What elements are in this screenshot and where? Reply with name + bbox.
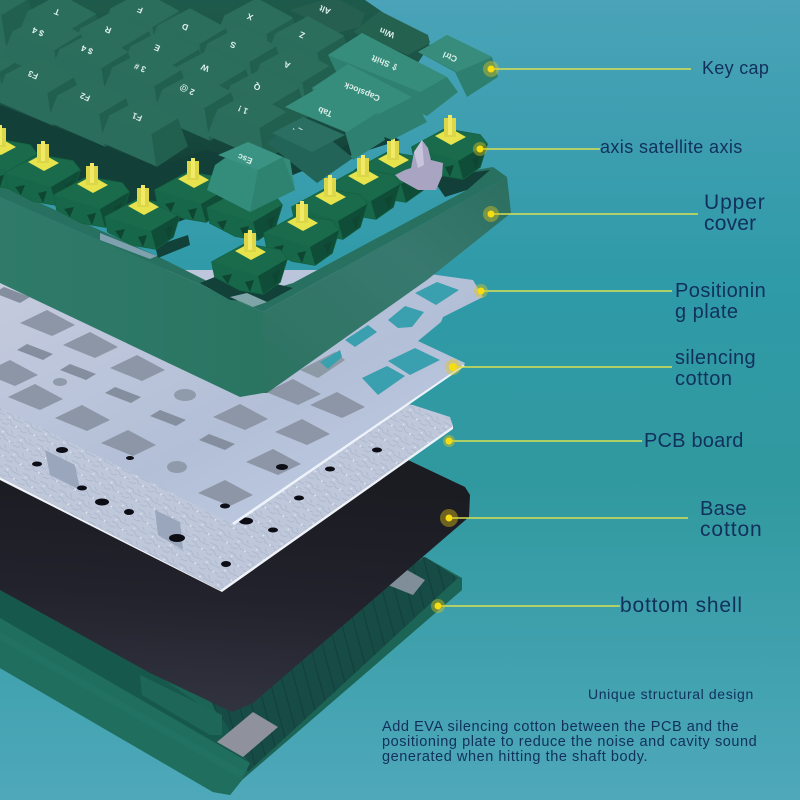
teal modifier keys: Capslock bbox=[342, 80, 381, 104]
label: axis satellite axis: axis satellite axis bbox=[600, 137, 743, 157]
dark keys: E bbox=[152, 42, 162, 54]
pcb mounting holes bbox=[32, 447, 382, 567]
dark keys: W bbox=[199, 61, 211, 74]
satellite axis stabilizer bbox=[395, 140, 443, 190]
PCB board bbox=[0, 380, 453, 592]
caption body bbox=[382, 719, 757, 765]
dark interior behind switches bbox=[0, 105, 400, 225]
esc key: Esc bbox=[236, 151, 254, 166]
caption body: positioning plate to reduce the noise and cavity sound bbox=[382, 734, 757, 750]
caption body: Add EVA silencing cotton between the PCB and the bbox=[382, 719, 739, 735]
dark keys: F3 bbox=[26, 68, 39, 81]
teal modifier keys bbox=[267, 33, 498, 183]
dark shadow under keys bbox=[0, 0, 430, 172]
dark keys: A bbox=[282, 59, 292, 71]
caption body: generated when hitting the shaft body. bbox=[382, 749, 648, 765]
label: bottom shell: bottom shell bbox=[620, 594, 743, 617]
dark keys: F2 bbox=[78, 90, 91, 103]
dark keys: 3 # bbox=[132, 61, 147, 75]
switch cutouts bbox=[0, 287, 365, 506]
dark keys: R bbox=[103, 24, 113, 36]
teal modifier keys: Ctrl bbox=[441, 50, 459, 64]
dark keys: Z bbox=[298, 29, 306, 41]
dark keys: $ 4 bbox=[30, 25, 45, 39]
plate holes bbox=[53, 378, 196, 473]
dark keys: Win bbox=[378, 25, 396, 41]
label: Upper cover: Upper bbox=[704, 191, 766, 214]
dark keys: X bbox=[245, 11, 255, 23]
label: Base cotton bbox=[440, 498, 763, 541]
dark keys: $ 4 bbox=[79, 43, 94, 57]
dark keys: T bbox=[52, 6, 61, 18]
dark keys: 1 ! bbox=[236, 103, 249, 116]
base cotton foam bbox=[0, 460, 470, 712]
key caps bbox=[0, 0, 498, 212]
esc key bbox=[207, 142, 295, 212]
label: Key cap bbox=[483, 58, 769, 78]
teal modifier keys: ~ ` bbox=[291, 121, 305, 135]
pad: rear rubber foot bbox=[388, 570, 425, 595]
label: Positioning plate: g plate bbox=[675, 301, 739, 323]
upper cover frame bbox=[0, 167, 511, 397]
label: Base cotton: Base bbox=[700, 498, 747, 520]
dark keys: Alt bbox=[318, 3, 332, 17]
label: silencing cotton bbox=[445, 347, 756, 390]
label: PCB board: PCB board bbox=[644, 430, 744, 452]
label: Upper cover bbox=[483, 191, 766, 235]
dark keys: Q bbox=[252, 81, 262, 93]
label: Positioning plate bbox=[474, 280, 766, 323]
cutouts showing background bbox=[320, 282, 459, 395]
label: silencing cotton: cotton bbox=[675, 368, 732, 390]
dark keys: S bbox=[228, 39, 238, 51]
label: silencing cotton: silencing bbox=[675, 347, 756, 369]
label: Positioning plate: Positionin bbox=[675, 280, 766, 302]
label: Base cotton: cotton bbox=[700, 518, 763, 541]
teal modifier keys: ⇧ Shift bbox=[370, 53, 400, 73]
positioning plate bbox=[0, 270, 483, 525]
key switches bbox=[0, 115, 487, 265]
front key switch bbox=[212, 230, 287, 294]
pad: front rubber foot bbox=[217, 712, 278, 757]
bottom shell bbox=[0, 557, 462, 795]
label: Upper cover: cover bbox=[704, 212, 756, 235]
label: axis satellite axis bbox=[473, 137, 743, 157]
dark keys: F bbox=[136, 4, 144, 16]
dark keys: 2 @ bbox=[178, 82, 196, 98]
dark keys: F1 bbox=[130, 110, 143, 123]
dark keys bbox=[0, 0, 430, 166]
teal modifier keys: Tab bbox=[316, 105, 334, 119]
caption heading: Unique structural design bbox=[588, 686, 754, 702]
label: Key cap: Key cap bbox=[702, 58, 769, 78]
label: bottom shell bbox=[431, 594, 743, 617]
dark keys: D bbox=[180, 21, 190, 33]
label: PCB board bbox=[443, 430, 744, 452]
